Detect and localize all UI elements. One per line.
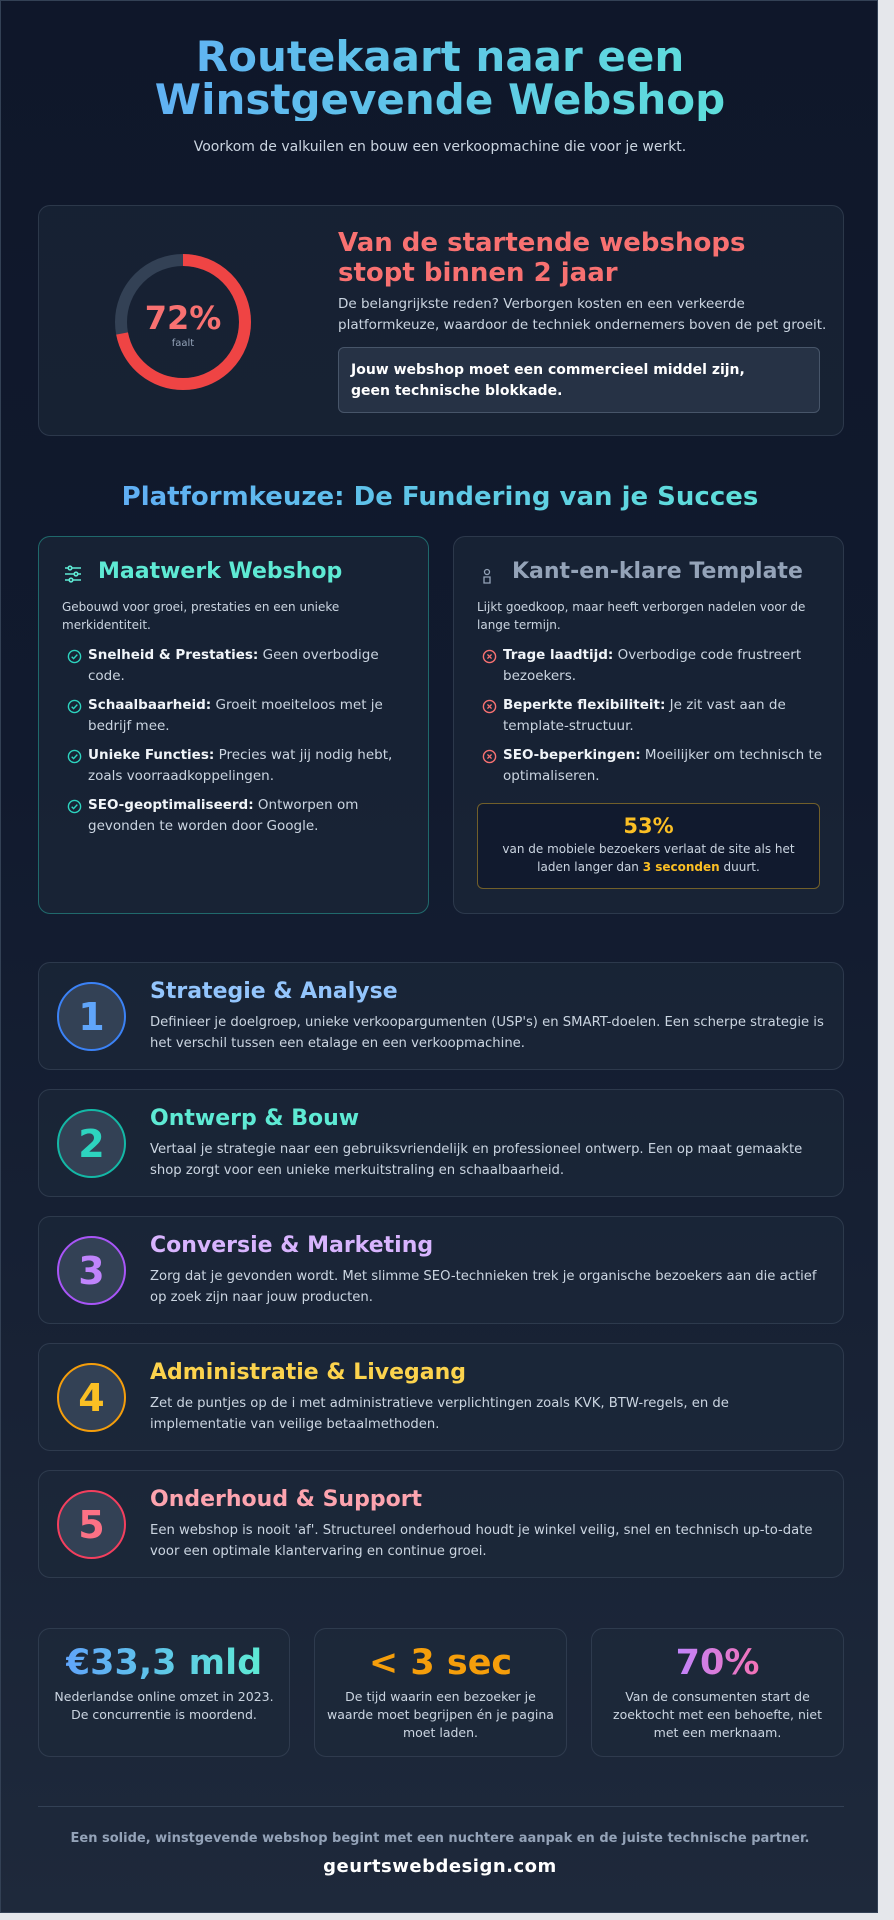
heading: Maatwerk Webshop bbox=[98, 559, 342, 584]
step 1 bbox=[38, 962, 844, 1070]
footer text: Een solide, winstgevende webshop begint met een nuchtere aanpak en de juiste technische partner. bbox=[71, 1831, 809, 1846]
chart: donut 72% bbox=[115, 254, 251, 390]
step 1: Definieer je doelgroep, unieke verkoopargumenten (USP's) en SMART-doelen. Een scherpe strategie is bbox=[150, 1015, 824, 1030]
step 2 bbox=[38, 1089, 844, 1197]
stat: omzet bbox=[38, 1628, 290, 1757]
callout: 53% bbox=[477, 803, 820, 889]
icon: pin bbox=[483, 568, 491, 584]
step 4 bbox=[38, 1343, 844, 1451]
list: cons: SEO-beperkingen: Moeilijker om technisch te optimaliseren. bbox=[503, 747, 822, 784]
heading: Kant-en-klare Template bbox=[512, 559, 803, 584]
list: cons: Trage laadtijd: Overbodige code frustreert bezoekers. bbox=[503, 647, 801, 684]
heading bbox=[338, 228, 745, 288]
step 5: Een webshop is nooit 'af'. Structureel onderhoud houdt je winkel veilig, snel en technisch up-to-date bbox=[150, 1523, 813, 1538]
footer url: geurtswebdesign.com bbox=[323, 1856, 557, 1877]
stat: 3 sec bbox=[314, 1628, 567, 1757]
subtitle: Voorkom de valkuilen en bouw een verkoopmachine die voor je werkt. bbox=[194, 139, 686, 155]
stat: omzet: €33,3 mld bbox=[66, 1643, 262, 1683]
step 3: Zorg dat je gevonden wordt. Met slimme SEO-technieken trek je organische bezoekers aan die actief bbox=[150, 1269, 817, 1284]
list: pros: SEO-geoptimaliseerd: Ontworpen om gevonden te worden door Google. bbox=[88, 797, 358, 834]
step 3: Conversie & Marketing bbox=[150, 1233, 433, 1258]
heading: Van de startende webshops bbox=[338, 228, 745, 258]
step 1: het verschil tussen een etalage en een verkoopmachine. bbox=[150, 1036, 525, 1051]
step 5: voor een optimale klantervaring en continue groei. bbox=[150, 1544, 487, 1559]
heading: stopt binnen 2 jaar bbox=[338, 258, 618, 288]
heading: platformkeuze: Platformkeuze: De Fundering van je Succes bbox=[122, 482, 758, 512]
step 5 bbox=[38, 1470, 844, 1578]
step 3 bbox=[38, 1216, 844, 1324]
step 4: 4 bbox=[78, 1376, 105, 1420]
step 1: Strategie & Analyse bbox=[150, 979, 398, 1004]
step 3: op zoek zijn naar jouw producten. bbox=[150, 1290, 373, 1305]
callout bbox=[338, 347, 820, 413]
callout: Jouw webshop moet een commercieel middel zijn, bbox=[351, 362, 745, 378]
text: Lijkt goedkoop, maar heeft verborgen nadelen voor de lange termijn. bbox=[477, 600, 805, 632]
title bbox=[1, 35, 879, 121]
step 2: Ontwerp & Bouw bbox=[150, 1106, 359, 1131]
list: pros: Schaalbaarheid: Groeit moeiteloos met je bedrijf mee. bbox=[88, 697, 383, 734]
panel: failure stat bbox=[38, 205, 844, 436]
text block: De belangrijkste reden? Verborgen kosten en een verkeerde platformkeuze, waardoor de techniek ondernemers boven de pet groeit. bbox=[338, 296, 826, 333]
list: cons bbox=[482, 647, 822, 784]
callout: 53%: laden langer dan 3 seconden duurt. bbox=[537, 860, 760, 874]
step 1: 1 bbox=[78, 994, 105, 1038]
list: cons: Beperkte flexibiliteit: Je zit vast aan de template-structuur. bbox=[503, 697, 786, 734]
stat: 70%: 70% bbox=[676, 1643, 759, 1683]
title: Routekaart naar een bbox=[196, 32, 684, 81]
list: pros: Unieke Functies: Precies wat jij nodig hebt, zoals voorraadkoppelingen. bbox=[88, 747, 392, 784]
stat: 70%: Van de consumenten start de zoektocht met een behoefte, niet met een merknaam. bbox=[613, 1689, 822, 1740]
stat: 70% bbox=[591, 1628, 844, 1757]
callout: 53%: van de mobiele bezoekers verlaat de site als het bbox=[502, 842, 795, 856]
list: pros bbox=[68, 647, 392, 834]
step 4: Zet de puntjes op de i met administratieve verplichtingen zoals KVK, BTW-regels, en de bbox=[150, 1396, 729, 1411]
stat: omzet: Nederlandse online omzet in 2023. De concurrentie is moordend. bbox=[54, 1689, 274, 1722]
list: pros: Snelheid & Prestaties: Geen overbodige code. bbox=[88, 647, 379, 684]
callout: 53%: 53% bbox=[623, 814, 674, 838]
panel: template bbox=[453, 536, 844, 914]
step 2: 2 bbox=[78, 1122, 105, 1166]
stat: 3 sec: < 3 sec bbox=[369, 1643, 512, 1683]
icon: sliders bbox=[65, 565, 81, 583]
title: Winstgevende Webshop bbox=[155, 75, 725, 124]
step 2: shop zorgt voor een unieke merkuitstraling en schaalbaarheid. bbox=[150, 1163, 564, 1178]
panel: maatwerk bbox=[38, 536, 429, 914]
step 4: implementatie van veilige betaalmethoden. bbox=[150, 1417, 439, 1432]
step 5: 5 bbox=[78, 1502, 105, 1546]
chart: donut 72%: faalt bbox=[172, 338, 194, 349]
text: Gebouwd voor groei, prestaties en een unieke merkidentiteit. bbox=[62, 600, 339, 632]
step 5: Onderhoud & Support bbox=[150, 1487, 422, 1512]
callout: geen technische blokkade. bbox=[351, 383, 562, 399]
step 4: Administratie & Livegang bbox=[150, 1360, 466, 1385]
step 3: 3 bbox=[78, 1248, 105, 1292]
stat: 3 sec: De tijd waarin een bezoeker je waarde moet begrijpen én je pagina moet laden. bbox=[327, 1689, 554, 1740]
step 2: Vertaal je strategie naar een gebruiksvriendelijk en professioneel ontwerp. Een op maat gemaakte bbox=[150, 1142, 802, 1157]
chart: donut 72%: 72% bbox=[145, 299, 221, 337]
